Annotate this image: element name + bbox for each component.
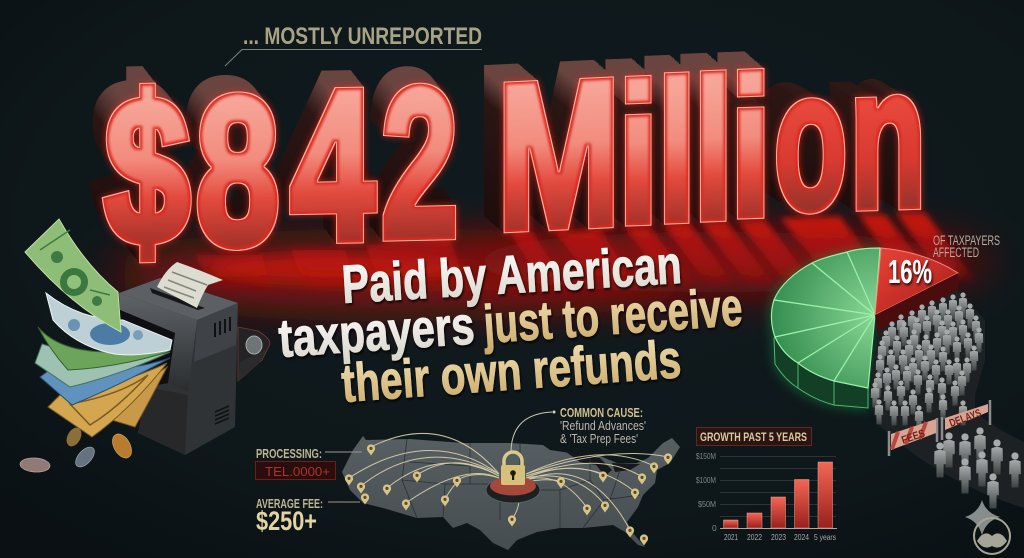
y axis labels: $100M [696, 475, 716, 485]
3D extrusion of letters: M [497, 37, 620, 274]
subheading: paid by American taxpayers: Paid by American [340, 235, 683, 315]
stat: average fee: AVERAGE FEE: [256, 497, 323, 511]
stat: processing: TEL.0000+ [265, 464, 330, 479]
x axis labels: 2024 [794, 532, 809, 542]
pie side wall [774, 337, 868, 408]
pie caption [933, 233, 1000, 260]
connection arcs [349, 433, 668, 530]
icon: money printer with bills and coins [20, 219, 270, 473]
3D extrusion of letters: i [730, 38, 772, 258]
barrier: delays [942, 400, 990, 440]
arc to common cause label [511, 410, 556, 451]
people in the queue [871, 292, 983, 430]
3D extrusion of letters: $ [105, 54, 190, 287]
coins [20, 425, 135, 473]
bars [724, 462, 832, 528]
glowing letter faces: l [657, 41, 696, 263]
blue bill [40, 358, 170, 405]
barrier: fees [889, 418, 937, 456]
x axis labels: 2023 [771, 532, 786, 542]
glowing letter faces: i [730, 38, 772, 258]
y axis labels: 0 [712, 523, 717, 533]
common cause label: COMMON CAUSE: [560, 405, 643, 420]
3D extrusion of letters: n [850, 25, 926, 251]
glowing letter faces [105, 25, 926, 289]
x axis labels [724, 532, 836, 542]
tagline: mostly unreported: ... MOSTLY UNREPORTED [243, 23, 482, 50]
chart title: GROWTH PAST 5 YEARS [700, 432, 807, 444]
gold bills [48, 363, 167, 437]
barrier: delays: DELAYS [948, 407, 983, 430]
top green bill [25, 219, 121, 332]
glowing letter faces: l [693, 38, 734, 261]
great lakes [566, 452, 640, 476]
glowing letter faces: o [774, 28, 847, 252]
glowing letter faces: $ [105, 54, 190, 287]
pie glow [770, 248, 880, 410]
3D extrusion of letters: i [618, 44, 659, 264]
map: United States with lock and pins [342, 405, 680, 550]
paper receipt [157, 262, 223, 308]
glowing letter faces: i [618, 44, 659, 264]
3D extrusion of letters: l [693, 38, 734, 261]
16% label: 16% [888, 253, 932, 290]
stat: average fee [256, 497, 360, 536]
red slice glow [878, 248, 958, 315]
pie caption: AFFECTED [933, 245, 979, 260]
y axis labels [696, 451, 717, 533]
common cause label: 'Refund Advances' [560, 418, 646, 433]
glowing letter faces: 8 [196, 54, 279, 289]
crowd of taxpayers and road [870, 290, 1024, 508]
chart title [696, 428, 812, 446]
3D extrusion of letters: 4 [291, 46, 374, 284]
location pins [345, 444, 672, 546]
common cause label: & 'Tax Prep Fees' [560, 431, 638, 446]
map outline [342, 436, 680, 550]
stat: average fee: $250+ [256, 506, 317, 536]
y axis labels: $150M [696, 451, 716, 461]
subheading: paid by American taxpayers: just to receive [481, 277, 744, 355]
icon: padlock [501, 452, 525, 485]
subheading: paid by American taxpayers: taxpayers [277, 295, 476, 369]
glowing letter faces: 2 [382, 44, 458, 281]
tagline: mostly unreported [225, 23, 482, 66]
x axis labels: 2021 [724, 532, 738, 542]
glowing letter faces: M [497, 37, 620, 274]
stat: processing: PROCESSING: [256, 447, 322, 461]
subheading: paid by American taxpayers [277, 235, 744, 414]
glowing letter faces: n [850, 25, 926, 251]
3D extrusion of letters: 2 [382, 44, 458, 281]
3D extrusion of letters [105, 25, 926, 289]
people past the barriers [934, 427, 1021, 508]
3D extrusion of letters: l [657, 41, 696, 263]
road [870, 290, 1024, 508]
green bill [38, 327, 170, 370]
state lines [402, 439, 640, 528]
printer body [119, 278, 238, 455]
y axis labels: $50M [698, 499, 716, 509]
chart: growth past 5 years [696, 428, 837, 542]
red slice side [875, 273, 958, 336]
3D extrusion of letters: 8 [196, 54, 279, 289]
chart: pie of taxpayers affected [770, 233, 1000, 410]
glowing letter faces: 4 [291, 46, 374, 284]
big 3D headline: $842 Million [105, 25, 926, 289]
x axis labels: 2022 [747, 532, 762, 542]
pale blue bill [46, 293, 172, 355]
icon: logo mark [965, 500, 1010, 554]
common cause label [560, 405, 646, 446]
x axis labels: 5 years [814, 532, 836, 542]
red slice [875, 248, 958, 315]
stat: processing [256, 447, 362, 480]
green pie wedges [771, 248, 880, 388]
barrier: fees: FEES [900, 428, 927, 447]
red floor glow under the headline number [110, 212, 990, 307]
red button base [486, 476, 540, 503]
subheading: paid by American taxpayers: their own refunds [339, 329, 683, 414]
teal bill [35, 344, 170, 387]
3D extrusion of letters: o [774, 28, 847, 252]
printer roller [238, 327, 270, 381]
